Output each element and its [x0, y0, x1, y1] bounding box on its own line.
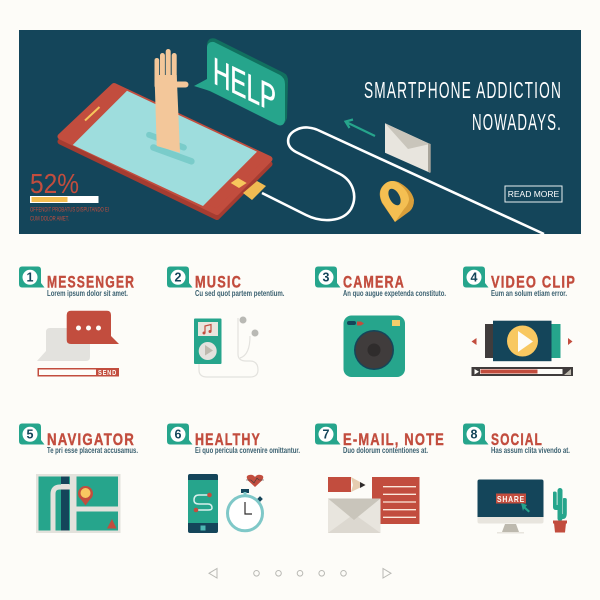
subtitle: Te pri esse placerat accusamus.	[47, 446, 138, 455]
charging cable	[262, 127, 544, 234]
next arrow	[383, 568, 391, 578]
heading: VIDEO CLIP	[491, 274, 576, 292]
subtitle: Has assum clita vivendo at.	[491, 446, 570, 455]
read more button	[505, 186, 562, 202]
heading: MESSENGER	[47, 274, 135, 292]
badge 6: 6	[175, 428, 182, 442]
connector	[243, 181, 266, 200]
heading: MUSIC	[195, 274, 242, 292]
section 4: video clip	[463, 266, 576, 376]
read more button: READ MORE	[508, 189, 560, 199]
icon: music player and earphones	[194, 316, 258, 377]
banner heading	[364, 77, 562, 135]
icon: envelope	[328, 498, 380, 533]
badge 5: 5	[27, 428, 34, 442]
icon: monitor with share button: SHARE	[497, 494, 525, 504]
stat: 52%: 52%	[30, 168, 79, 199]
icon: note	[372, 477, 420, 524]
stat: 52%: OFFENDIT PROBATUS DISPUTANDO EI	[30, 208, 109, 214]
section 6: healthy	[167, 424, 300, 533]
heading: HEALTHY	[195, 431, 261, 449]
badge 3: 3	[323, 271, 330, 285]
teal arrow	[346, 120, 375, 136]
subtitle: Lorem ipsum dolor sit amet.	[47, 289, 128, 298]
section 1: messenger	[19, 266, 135, 377]
heading: NAVIGATOR	[47, 431, 135, 449]
icon: stopwatch and heart	[228, 475, 264, 531]
section 7: e-mail, note	[315, 424, 445, 533]
icon: pencil	[328, 477, 366, 492]
badge 2: 2	[175, 271, 182, 285]
heading: E-MAIL, NOTE	[343, 431, 445, 449]
speech bubble: HELP	[194, 38, 288, 125]
previous arrow	[209, 568, 217, 578]
section 2: music	[167, 266, 284, 377]
subtitle: Ei quo pericula convenire omittantur.	[195, 446, 300, 455]
icon: chat bubbles: SEND	[98, 368, 117, 377]
icon: map	[36, 474, 120, 533]
icon: phone with route	[188, 474, 218, 533]
stat: 52%	[30, 168, 109, 222]
HELP lettering: HELP	[213, 49, 276, 122]
section 3: camera	[315, 266, 446, 377]
section 8: social	[463, 424, 570, 534]
envelope	[385, 123, 431, 173]
icon: cactus	[553, 488, 567, 532]
subtitle: Duo dolorum contentiones at.	[343, 446, 428, 455]
stat: 52%: CUM DOLOR AMET.	[30, 216, 69, 222]
badge 1: 1	[27, 271, 34, 285]
hand reaching out of the screen	[145, 49, 196, 165]
badge 7: 7	[323, 428, 330, 442]
section 5: navigator	[19, 424, 138, 533]
heading: SOCIAL	[491, 431, 543, 449]
icon: camera	[344, 316, 405, 377]
subtitle: An quo augue expetenda constituto.	[343, 289, 446, 298]
subtitle: Cu sed quot partem petentium.	[195, 289, 284, 298]
heading: CAMERA	[343, 274, 405, 292]
pagination controls	[209, 568, 391, 578]
phone	[60, 86, 270, 217]
subtitle: Eum an solum etiam error.	[491, 289, 567, 298]
badge 4: 4	[471, 271, 478, 285]
map pin	[380, 181, 414, 222]
banner panel	[19, 30, 581, 234]
badge 8: 8	[471, 428, 478, 442]
icon: video player	[472, 321, 573, 376]
